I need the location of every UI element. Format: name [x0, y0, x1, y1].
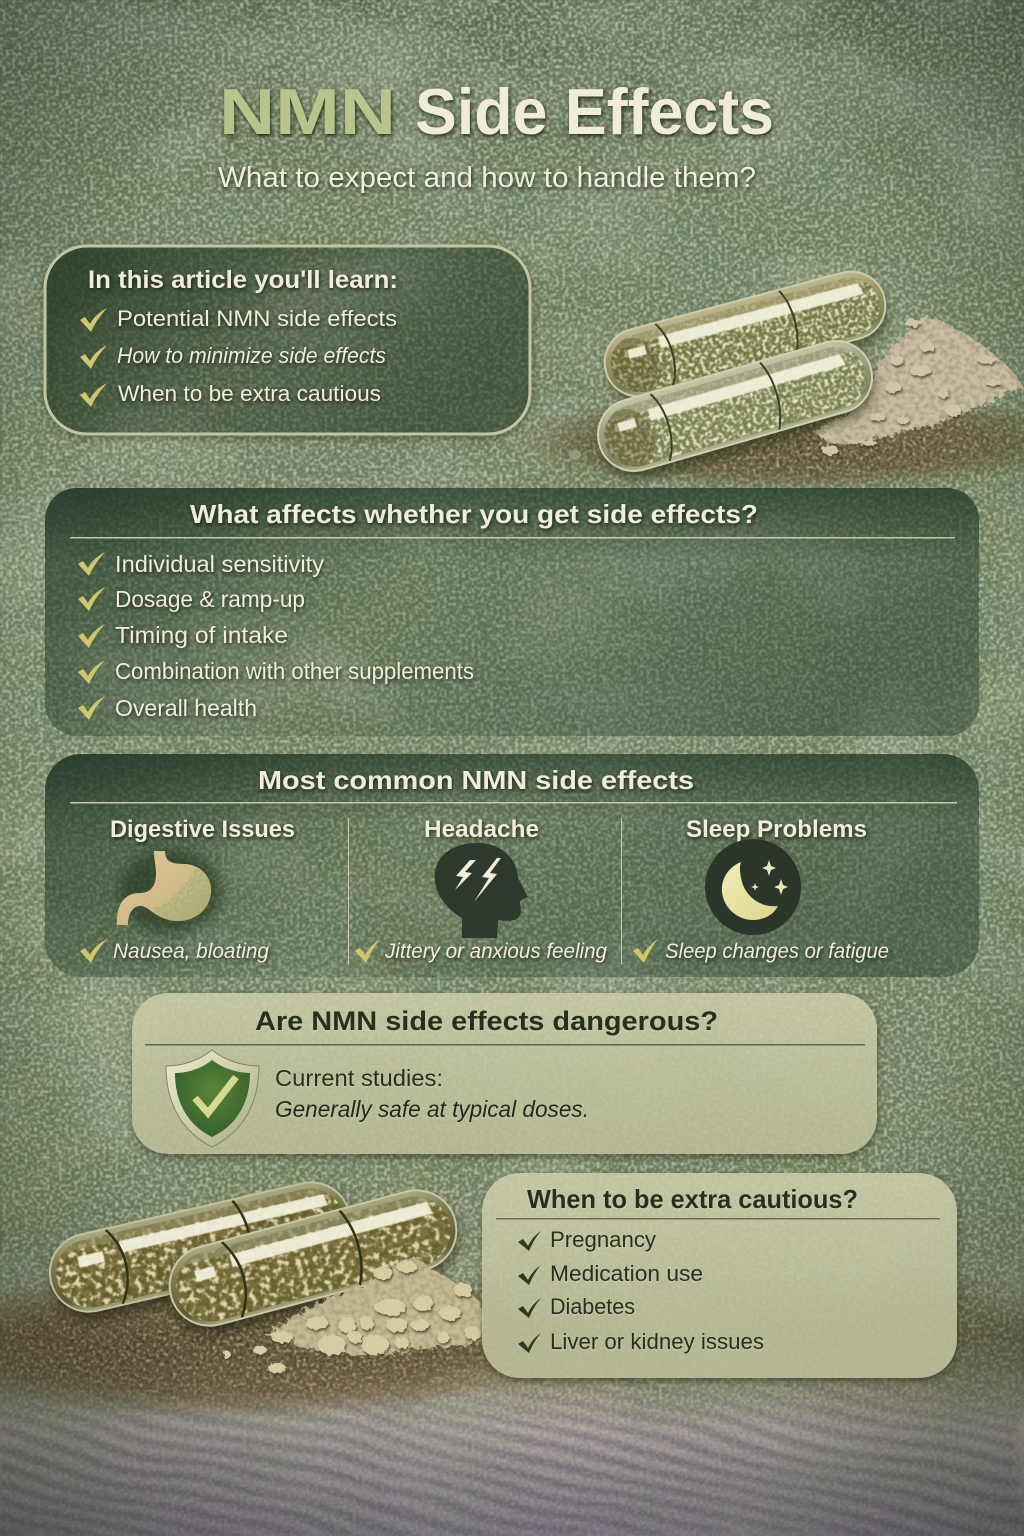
title — [219, 75, 774, 148]
checklist: factors: Individual sensitivity — [115, 551, 325, 577]
column: sleep problems: Sleep Problems — [686, 816, 867, 843]
capsule: bottom back — [42, 1175, 360, 1327]
text: current studies: Current studies: — [275, 1065, 443, 1091]
checklist: in this article: Potential NMN side effects — [117, 306, 397, 331]
capsules and powder: bottom — [42, 1175, 484, 1373]
text: generally safe: Generally safe at typical doses. — [275, 1096, 589, 1122]
capsule: bottom front — [161, 1181, 467, 1342]
icon: shield with check — [166, 1050, 259, 1147]
title: NMN — [219, 75, 396, 148]
panel heading: cautious: When to be extra cautious? — [527, 1184, 858, 1214]
panel heading: in this article: In this article you'll learn: — [88, 266, 398, 294]
column: digestive issues: Nausea, bloating — [113, 939, 269, 963]
panel: are side effects dangerous — [132, 993, 877, 1154]
column: sleep problems: Sleep changes or fatigue — [665, 939, 889, 963]
checklist: cautions — [518, 1227, 764, 1354]
panel heading: dangerous: Are NMN side effects dangerous? — [255, 1006, 718, 1036]
checklist: factors: Timing of intake — [115, 622, 288, 648]
panel heading: what affects: What affects whether you get side effects? — [190, 499, 758, 529]
column: digestive issues — [80, 816, 295, 963]
checklist: in this article — [80, 306, 397, 407]
column: headache: Jittery or anxious feeling — [384, 939, 607, 963]
icon: moon and stars — [705, 839, 801, 935]
checklist: cautions: Pregnancy — [550, 1227, 657, 1252]
column: headache — [355, 816, 607, 963]
powder pile: bottom — [223, 1258, 484, 1373]
capsule: top front — [590, 333, 883, 487]
capsule: top back — [599, 270, 894, 402]
column: headache: Headache — [424, 816, 539, 843]
checklist: factors — [78, 551, 474, 721]
panel: when to be extra cautious — [482, 1173, 957, 1378]
checklist: cautions: Liver or kidney issues — [550, 1329, 764, 1354]
powder pile: top — [569, 317, 1022, 460]
checklist: cautions: Medication use — [550, 1261, 703, 1286]
panel: most common side effects — [45, 754, 979, 977]
checklist: factors: Overall health — [115, 695, 257, 721]
checklist: factors: Combination with other supplements — [115, 658, 474, 684]
icon: head with lightning — [435, 843, 528, 938]
panel: in this article — [45, 246, 530, 434]
column: sleep problems — [633, 816, 889, 963]
checklist: factors: Dosage & ramp-up — [115, 586, 305, 612]
title: Side Effects — [415, 75, 774, 148]
panel heading: most common: Most common NMN side effects — [258, 765, 694, 795]
checklist: cautions: Diabetes — [550, 1294, 635, 1319]
panel: what affects side effects — [45, 488, 979, 736]
column: digestive issues: Digestive Issues — [110, 816, 295, 843]
checklist: in this article: How to minimize side effects — [117, 343, 386, 368]
checklist: in this article: When to be extra cautious — [118, 381, 381, 406]
subtitle: What to expect and how to handle them? — [218, 162, 756, 194]
icon: stomach — [117, 850, 222, 934]
capsules and powder: top — [569, 264, 1022, 487]
